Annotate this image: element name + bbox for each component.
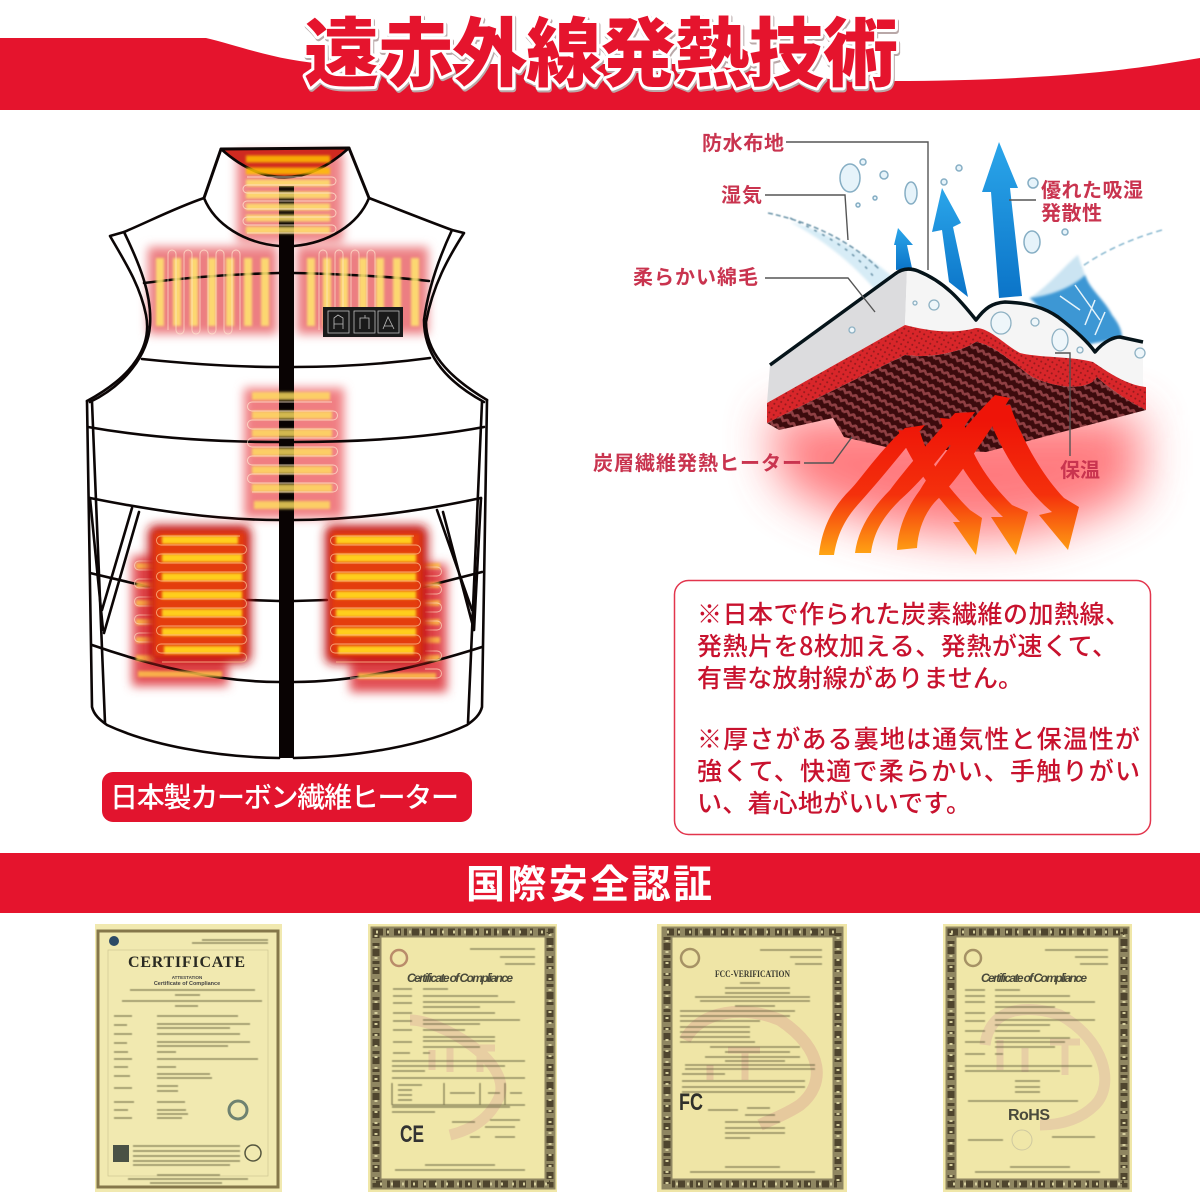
center heater coil [248, 396, 338, 505]
vest outline [87, 148, 487, 758]
certificate 1 [95, 924, 282, 1192]
certificate 1: Certificate of Compliance [154, 981, 220, 987]
certificate 3: FC [679, 1089, 703, 1116]
certificate 3: FCC-VERIFICATION [715, 969, 790, 979]
certification band: 国際安全認証 [466, 854, 712, 910]
certification band [0, 853, 1200, 913]
watermark [410, 1020, 501, 1135]
waterproof fabric top line [770, 269, 1143, 365]
certificate 4: RoHS [1008, 1107, 1050, 1124]
description box: 強くて、快適で柔らかい、手触りがい [697, 752, 1140, 788]
heater glows behind vest [132, 152, 447, 692]
lower left heater [148, 525, 251, 664]
collar heater coil [243, 159, 336, 233]
certificate 2: Certificate of Compliance [407, 971, 513, 985]
certificate 2: CE [400, 1121, 424, 1148]
carbon fibre heater [767, 342, 1146, 452]
blue arrows: moisture wicking [894, 142, 1022, 298]
label: soft down: 柔らかい綿毛 [633, 261, 758, 290]
description box: 有害な放射線がありません。 [697, 659, 1023, 695]
red mesh layer [767, 325, 1146, 423]
description box [674, 580, 1150, 834]
watermark [685, 1012, 817, 1125]
certificate 1: CERTIFICATE [128, 954, 245, 971]
certificate 4: Certificate of Compliance [981, 971, 1087, 985]
watermark [985, 1009, 1105, 1125]
top red banner [0, 38, 1200, 110]
label: carbon heater: 炭層繊維発熱ヒーター [593, 447, 802, 476]
zipper [279, 186, 294, 758]
controller [323, 307, 403, 337]
description box: い、着心地がいいです。 [697, 784, 971, 820]
water splash [768, 159, 1162, 345]
panel: heated vest [87, 146, 487, 758]
label: wicking [1041, 174, 1143, 226]
label: waterproof fabric: 防水布地 [702, 127, 784, 156]
certificate 3 [657, 924, 847, 1192]
leader lines [765, 142, 1070, 463]
description box: ※厚さがある裏地は通気性と保温性が [697, 720, 1140, 756]
droplets in filling [849, 300, 1145, 358]
label: warmth: 保温 [1060, 454, 1100, 483]
grey insulation face [767, 268, 907, 403]
panel: fabric cross-section [593, 127, 1162, 555]
right chest heater coil [311, 250, 415, 334]
label: wicking: 発散性 [1041, 197, 1102, 226]
certificate 1: ATTESTATION [172, 975, 202, 980]
fabric layers [767, 268, 1146, 452]
certificate 4 [943, 924, 1132, 1192]
left chest heater coil [160, 250, 265, 334]
heat glow [770, 415, 1140, 537]
description box: 発熱片を8枚加える、発熱が速くて、 [697, 627, 1117, 663]
red heat arrows [819, 395, 1079, 555]
back-panel heater coils [134, 561, 442, 678]
label: moisture: 湿気 [721, 179, 762, 208]
certificate 2 [368, 924, 557, 1192]
label: wicking: 優れた吸湿 [1041, 174, 1143, 203]
collar heater upper section [224, 150, 345, 176]
lower right heater [325, 525, 428, 664]
description box: ※日本で作られた炭素繊維の加熱線、 [697, 595, 1130, 631]
caption pill: 日本製カーボン繊維ヒーター [110, 776, 459, 816]
